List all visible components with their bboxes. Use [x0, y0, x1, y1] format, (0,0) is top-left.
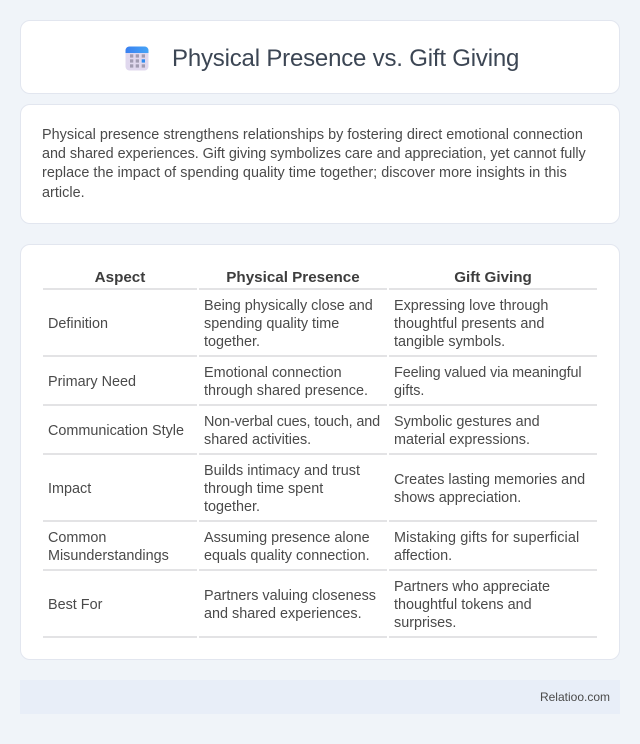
- row: common misunderstandings: Mistaking gifts for superficial: [394, 530, 579, 546]
- row: best for: [43, 579, 597, 638]
- row: impact: together.: [204, 499, 260, 515]
- row: primary need: Primary Need: [48, 374, 136, 390]
- row: common misunderstandings: affection.: [394, 548, 452, 564]
- row: definition: [43, 298, 597, 357]
- row: communication style: shared activities.: [204, 432, 311, 448]
- row: definition: Definition: [48, 316, 108, 332]
- table header: Physical Presence: [226, 269, 360, 286]
- table header: Aspect: [95, 269, 145, 286]
- row: best for: and shared experiences.: [204, 606, 362, 622]
- panel: title card: [20, 20, 620, 94]
- intro text: article.: [42, 185, 85, 201]
- row: primary need: [43, 365, 597, 406]
- row: impact: Builds intimacy and trust: [204, 463, 360, 479]
- row: best for: Partners valuing closeness: [204, 588, 376, 604]
- panel: comparison table: [20, 244, 620, 660]
- row: common misunderstandings: [43, 530, 597, 571]
- row: definition: thoughtful presents and: [394, 316, 544, 332]
- row: definition: Being physically close and: [204, 298, 373, 314]
- row: communication style: material expressions.: [394, 432, 530, 448]
- intro text: Physical presence strengthens relationships by fostering direct emotional connection: [42, 127, 583, 143]
- row: impact: Creates lasting memories and: [394, 472, 585, 488]
- row: primary need: gifts.: [394, 383, 424, 399]
- footer bar: [20, 680, 620, 714]
- row: definition: spending quality time: [204, 316, 339, 332]
- row: communication style: [43, 414, 597, 455]
- row: best for: surprises.: [394, 615, 456, 631]
- row: best for: thoughtful tokens and: [394, 597, 532, 613]
- row: best for: Best For: [48, 597, 102, 613]
- table header: [43, 269, 597, 290]
- row: common misunderstandings: equals quality connection.: [204, 548, 370, 564]
- row: communication style: Symbolic gestures and: [394, 414, 540, 430]
- row: definition: Expressing love through: [394, 298, 548, 314]
- row: common misunderstandings: Assuming presence alone: [204, 530, 370, 546]
- intro text: replace the impact of spending quality time together; discover more insights in this: [42, 165, 567, 181]
- row: common misunderstandings: Misunderstandings: [48, 548, 169, 564]
- row: impact: [43, 463, 597, 522]
- row: definition: tangible symbols.: [394, 334, 505, 350]
- panel: intro: [20, 104, 620, 224]
- title: Physical Presence vs. Gift Giving: [172, 45, 519, 72]
- row: best for: Partners who appreciate: [394, 579, 550, 595]
- table header: Gift Giving: [454, 269, 532, 286]
- row: impact: shows appreciation.: [394, 490, 521, 506]
- intro text: [42, 127, 586, 201]
- row: primary need: Feeling valued via meaningful: [394, 365, 582, 381]
- row: communication style: Communication Style: [48, 423, 184, 439]
- intro text: and shared experiences. Gift giving symbolizes care and appreciation, yet cannot fully: [42, 146, 586, 162]
- icon: calendar: [126, 46, 148, 70]
- row: impact: Impact: [48, 481, 91, 497]
- row: communication style: Non-verbal cues, touch, and: [204, 414, 380, 430]
- row: impact: through time spent: [204, 481, 323, 497]
- footer text: Relatioo.com: [540, 690, 610, 704]
- row: primary need: Emotional connection: [204, 365, 342, 381]
- row: common misunderstandings: Common: [48, 530, 106, 546]
- row: primary need: through shared presence.: [204, 383, 368, 399]
- row: definition: together.: [204, 334, 260, 350]
